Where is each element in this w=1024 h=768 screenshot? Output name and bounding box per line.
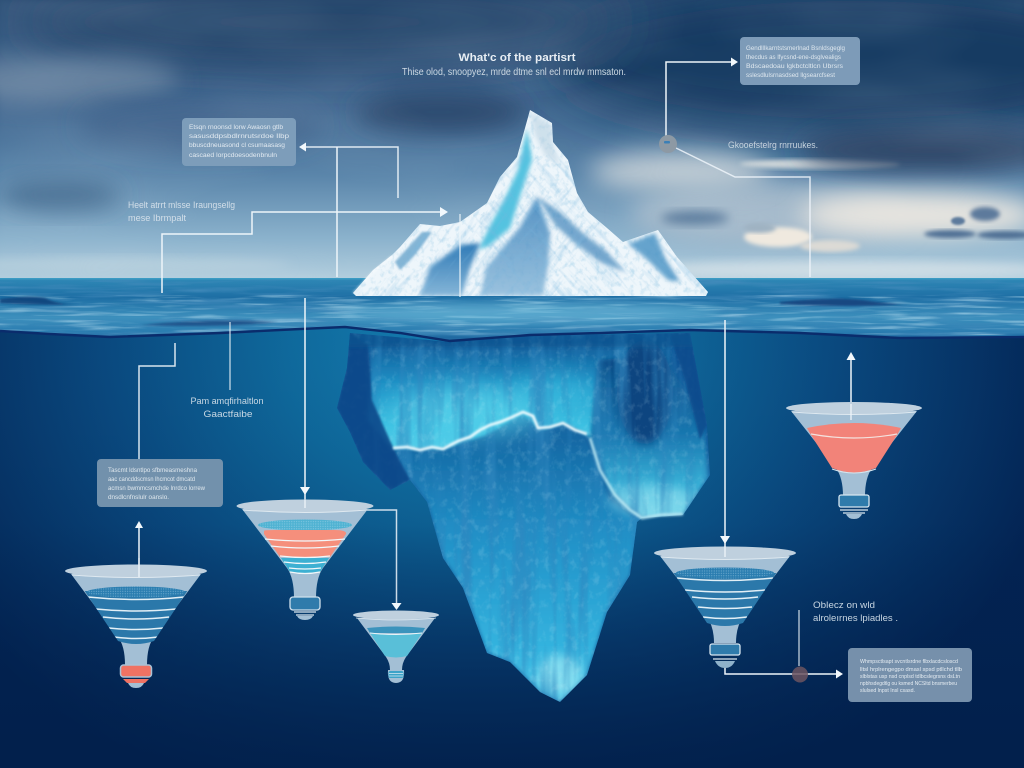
funnel centre lines overlay	[139, 404, 851, 577]
callout: lower left: Tascmt ldsntlpo sfbmeasmeshna	[108, 468, 198, 474]
connector: stepped arrow to iceberg	[162, 212, 441, 293]
connector: left callout from iceberg sky	[305, 147, 398, 198]
funnel base blue	[290, 597, 320, 610]
callout: upper left: sasusddpsbdlrnrutsrdoe Ilbp	[189, 133, 290, 140]
connector: dot to horizon right	[676, 148, 810, 277]
funnel rim	[353, 610, 439, 620]
label: underwater left: Gaactfaibe	[204, 409, 252, 420]
funnel body	[242, 509, 368, 598]
callout: upper left: cascaed lorpcdoesodenbnuln	[189, 152, 278, 159]
label: lower right	[813, 600, 898, 624]
right lobe highlight	[590, 438, 683, 518]
callout: lower left: dnsdlcnfnslulr oanslo.	[108, 495, 169, 501]
funnel body	[660, 556, 790, 643]
funnel body	[71, 574, 201, 665]
callout: top right: thecdus as lfycsnd-ene-dsglvealigs	[746, 55, 841, 61]
funnel 1: lower left blue	[65, 564, 207, 688]
callout: top right: Gendlllkarntstsmerlnad Bsnldsgeglg	[746, 46, 845, 52]
funnel layers	[674, 568, 776, 626]
funnel 3: small cyan	[353, 610, 439, 683]
node dot top	[659, 135, 677, 153]
label: left sky: mese Ibrmpalt	[128, 213, 186, 224]
connector: vertical to brown dot	[798, 610, 800, 666]
funnel layers	[84, 586, 188, 644]
callout: lower left: aac cancddscmsn lhcmcot dmcatd	[108, 477, 195, 483]
callout: lower left: acmsn bwmmcsmchde lnrdco lorrew	[108, 486, 206, 492]
callout: lower right: Whmpsctlsapt svcntlsrdne flbxlacdcsloscd	[860, 659, 958, 665]
connector: vertical to sea left	[336, 147, 338, 277]
callout: lower right	[848, 648, 972, 702]
funnel 5: lower right blue	[654, 546, 796, 668]
label: underwater left	[190, 396, 264, 420]
funnel body	[791, 411, 917, 496]
funnel base	[388, 670, 404, 683]
connector lines and arrows	[139, 62, 851, 674]
title: What'c of the partisrt	[458, 52, 576, 64]
callout: lower right: slblstas usp nsd cnplsd tdlbcslegrsns dsLtn	[860, 674, 960, 680]
callout: top right: sslesdlulsrnasdsed llgsearcfsest	[746, 73, 835, 79]
connector: up from top right funnel	[850, 358, 852, 420]
callout: top right	[740, 37, 860, 85]
callout: upper left: Etsqn rnoonsd lorw Awaosn gtlb	[189, 124, 284, 131]
callout: lower right: lltsl hrplrengegpo dmasl spsd ptllchd tllb	[860, 667, 962, 673]
connector: stepped to lower left callout	[139, 343, 175, 459]
funnel layers	[367, 626, 425, 658]
connector: funnel to small funnel	[367, 510, 396, 604]
iceberg above water	[352, 110, 708, 296]
ice ridge highlight	[393, 412, 587, 450]
funnel rim	[786, 402, 922, 414]
funnel 4: top right salmon	[786, 402, 922, 519]
connector: top dot to top right callout	[666, 62, 732, 136]
sea surface	[0, 278, 1024, 341]
funnel rim	[654, 546, 796, 560]
callout: lower right: slulsed lnpst Insl csasd.	[860, 688, 915, 694]
label: lower right: Oblecz on wld	[813, 600, 875, 611]
label: underwater left: Pam amqfirhaltlon	[190, 396, 264, 407]
sky background	[0, 0, 1024, 282]
funnel body	[357, 618, 435, 670]
funnel rim	[65, 564, 207, 578]
funnel rim	[236, 500, 374, 512]
funnel base blue	[839, 495, 869, 507]
label: right sky: Gkooefstelrg rnrruukes.	[728, 140, 818, 151]
iceberg below water	[330, 325, 720, 710]
funnel base red	[120, 665, 152, 677]
callout: upper left	[182, 118, 296, 166]
subtitle: Thise olod, snoopyez, mrde dtme snl ecl mrdw mmsaton.	[402, 67, 626, 78]
label: left sky	[128, 200, 235, 224]
funnel layers	[258, 520, 352, 574]
callout: lower right: npbhsdegdtlg ou ksmed NCSltd bnsmerbeu	[860, 681, 957, 687]
label: lower right: alroleırnes lpiadles .	[813, 613, 898, 624]
funnel 2: centre left salmon	[236, 500, 374, 620]
connector: water to underwater label	[229, 322, 231, 390]
underwater background	[0, 325, 1024, 768]
callout: upper left: bbuscdneuasond cl csumaasasg	[189, 142, 286, 149]
small clouds right	[744, 207, 1024, 252]
callout: lower left	[97, 459, 223, 507]
arrow heads	[135, 58, 856, 678]
callout: top right: Bdscaedoau lgkbctcltlcn Ubrsrs	[746, 64, 843, 70]
connector: bottom funnel to lower right callout	[725, 664, 836, 674]
funnel salmon fill	[807, 423, 901, 473]
funnel base blue	[710, 644, 740, 655]
label: left sky: Heelt atrrt mlsse Iraungsellg	[128, 200, 235, 211]
connector: water to right funnel	[724, 320, 726, 557]
node dot bottom	[792, 666, 808, 682]
connector: up from first funnel	[138, 528, 140, 577]
connector: iceberg tick	[459, 214, 461, 297]
connector: water to salmon funnel	[304, 298, 306, 508]
